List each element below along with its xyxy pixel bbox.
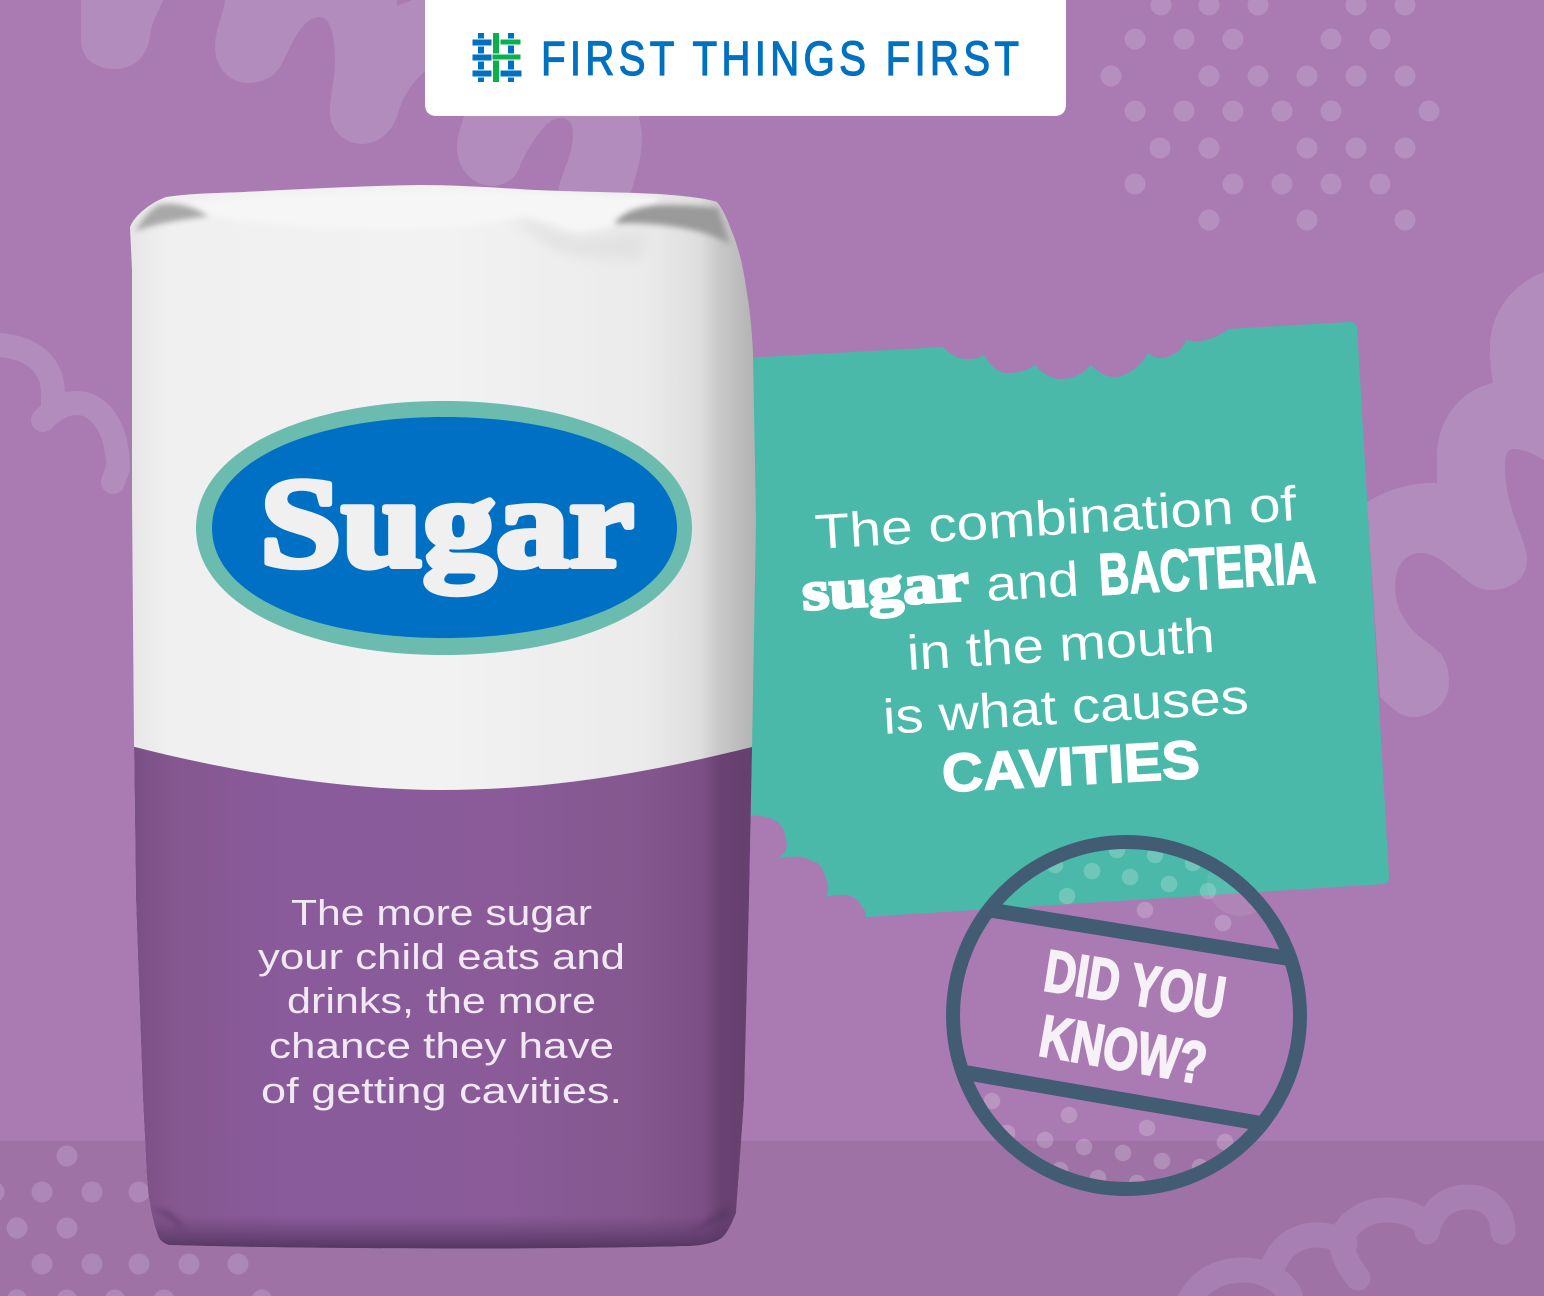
bag text block: chance they have bbox=[269, 1025, 614, 1066]
bag text block: drinks, the more bbox=[287, 980, 596, 1021]
background blob: right bbox=[1367, 272, 1544, 717]
badge band lines bbox=[962, 910, 1292, 1123]
bag text block: The more sugar bbox=[291, 892, 592, 933]
badge dots and band bbox=[984, 849, 1256, 1182]
callout text: in the mouth: in the mouth bbox=[905, 609, 1216, 681]
label: sugar wordmark: Sugar bbox=[260, 452, 634, 594]
bag body bbox=[120, 175, 770, 1260]
label: blue oval bbox=[212, 417, 677, 638]
badge text: did you: DID YOU bbox=[1040, 938, 1230, 1031]
background squiggle: bottom right bbox=[1190, 1197, 1503, 1296]
sugar bag bbox=[120, 175, 770, 1260]
callout text: sugar: sugar bbox=[800, 551, 970, 623]
icon: woven hash logo bbox=[472, 33, 522, 82]
bag text block: of getting cavities. bbox=[261, 1070, 622, 1111]
callout text: bacteria: BACTERIA bbox=[1097, 530, 1317, 608]
floor band bbox=[0, 1141, 1544, 1296]
logo wordmark: FIRST THINGS FIRST bbox=[541, 33, 1019, 86]
bag text block bbox=[258, 892, 625, 1111]
callout text: cavities: CAVITIES bbox=[940, 730, 1201, 804]
bag text block: your child eats and bbox=[258, 936, 625, 977]
did you know badge bbox=[940, 842, 1320, 1191]
dot pattern: top right bbox=[1100, 0, 1440, 230]
callout text: is what causes: is what causes bbox=[882, 670, 1250, 745]
callout text: the combination of: The combination of bbox=[813, 477, 1298, 560]
background blobs: top left bbox=[81, 0, 642, 195]
callout text: and: and bbox=[984, 553, 1080, 612]
dot pattern: bottom left bbox=[0, 1146, 272, 1296]
badge ring bbox=[953, 842, 1300, 1189]
logo card bbox=[425, 0, 1066, 116]
background squiggle: left bbox=[0, 345, 118, 482]
label: teal oval bbox=[196, 401, 692, 655]
badge text: know: KNOW? bbox=[1035, 1003, 1212, 1097]
teal callout panel bbox=[745, 322, 1389, 917]
